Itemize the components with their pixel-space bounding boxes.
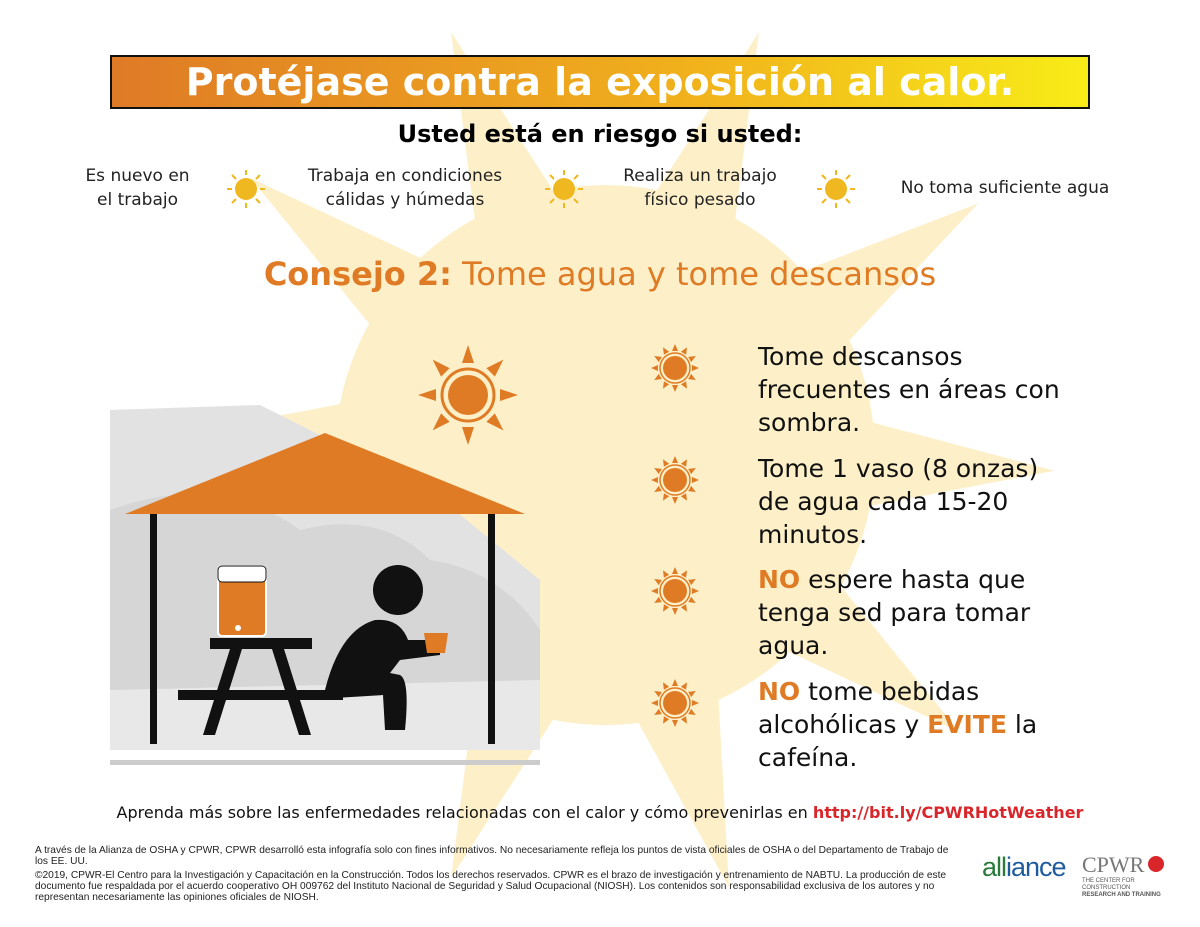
risk: new: Es nuevo en	[85, 166, 190, 186]
person	[325, 565, 440, 730]
risk: hot humid	[308, 166, 502, 210]
tip 1	[758, 342, 1060, 437]
risk: new: el trabajo	[97, 190, 178, 210]
posts	[150, 514, 157, 744]
risk: new	[85, 166, 190, 210]
tip 2: de agua cada 15-20	[758, 487, 1008, 516]
tip 1: frecuentes en áreas con	[758, 375, 1060, 404]
orange sun	[418, 345, 518, 445]
risk: water: No toma suficiente agua	[901, 178, 1109, 198]
gray hills	[110, 405, 540, 750]
risk: heavy work	[623, 166, 777, 210]
tip 4: alcohólicas y EVITE la	[758, 710, 1037, 739]
risk: heavy work: físico pesado	[644, 190, 756, 210]
small sun icons	[227, 170, 855, 208]
illustration: shade tent	[110, 345, 540, 765]
tip 2	[758, 454, 1038, 549]
tip 3: tenga sed para tomar	[758, 598, 1030, 627]
tip 4: cafeína.	[758, 743, 857, 772]
logo: CPWR: CPWR	[1082, 852, 1144, 877]
water cooler	[218, 566, 266, 636]
tip 3	[758, 565, 1030, 660]
logo: CPWR: THE CENTER FOR CONSTRUCTION	[1082, 878, 1135, 891]
ground line	[110, 760, 540, 765]
tip 4: NO tome bebidas	[758, 677, 979, 706]
tip 4	[758, 677, 1037, 772]
tips list	[758, 342, 1060, 772]
risk: hot humid: cálidas y húmedas	[326, 190, 484, 210]
tip 2: minutos.	[758, 520, 867, 549]
orange list suns	[651, 344, 699, 727]
risk: hot humid: Trabaja en condiciones	[308, 166, 502, 186]
tip 3: NO espere hasta que	[758, 565, 1025, 594]
learn more line: Aprenda más sobre las enfermedades relacionadas con el calor y cómo prevenirlas en http://bit.ly/CPWRHotWeather	[117, 803, 1083, 822]
logo: CPWR: RESEARCH AND TRAINING	[1082, 892, 1161, 898]
roof	[125, 433, 525, 514]
logo: CPWR	[1082, 852, 1164, 898]
disclaimer: A través de la Alianza de OSHA y CPWR, CPWR desarrolló esta infografía solo con fines informativos. No necesariamente refleja los puntos de vista oficiales de OSHA o del Departamento de Trabajo de los EE. UU. ©2019, CPWR-El Centro para la Investigación y Capacitación en la Construcción. Todos los derechos reservados. CPWR es el brazo de investigación y entrenamiento de NABTU. La producción de este documento fue respaldada por el acuerdo cooperativo OH 009762 del Instituto Nacional de Seguridad y Salud Ocupacional (NIOSH). Los contenidos son responsabilidad exclusiva de los autores y no representan necesariamente las opiniones oficiales de NIOSH.	[35, 845, 948, 903]
risk factors row	[85, 166, 1109, 210]
title bar: Protéjase contra la exposición al calor.	[186, 60, 1014, 104]
tip 2: Tome 1 vaso (8 onzas)	[758, 454, 1038, 483]
subheading: Usted está en riesgo si usted:	[398, 120, 802, 148]
logo: alliance: alliance	[982, 852, 1066, 882]
risk: heavy work: Realiza un trabajo	[623, 166, 777, 186]
tip 1: sombra.	[758, 408, 860, 437]
title bar	[110, 55, 1090, 109]
tip 3: agua.	[758, 631, 828, 660]
tip 1: Tome descansos	[758, 342, 963, 371]
tip heading: Consejo 2: Tome agua y tome descansos	[264, 255, 936, 293]
table	[178, 638, 343, 735]
